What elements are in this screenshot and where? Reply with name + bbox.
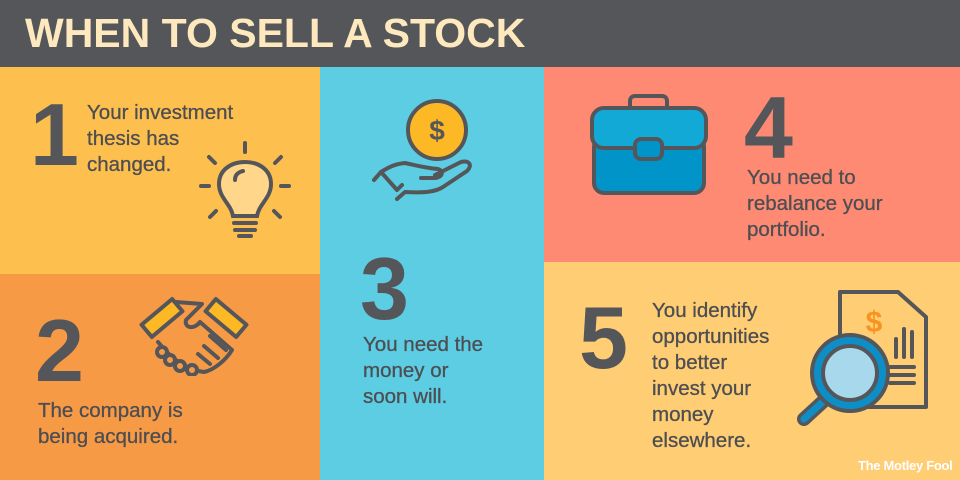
icon: hand with coin [372, 99, 472, 202]
number 1: 1 [30, 85, 79, 184]
panel 5 [544, 262, 960, 480]
number 5: 5 [579, 288, 628, 387]
text 2: The company is [38, 399, 183, 422]
title: WHEN TO SELL A STOCK [25, 10, 525, 56]
icon: document with magnifier [797, 290, 928, 426]
text 4: portfolio. [747, 218, 826, 241]
text 2 [38, 399, 183, 448]
text 1 [87, 101, 234, 176]
text 3: You need the [363, 333, 483, 356]
number 4: 4 [744, 78, 793, 177]
text 3 [363, 333, 483, 408]
text 5 [652, 299, 769, 452]
text 1: thesis has [87, 127, 179, 150]
icon: lightbulb [199, 141, 291, 238]
icon: briefcase [590, 94, 708, 195]
text 2: being acquired. [38, 425, 178, 448]
text 5: elsewhere. [652, 429, 751, 452]
text 3: money or [363, 359, 448, 382]
icon: document with magnifier: $ [866, 306, 883, 339]
icon: handshake [139, 296, 249, 376]
text 5: to better [652, 351, 727, 374]
text 5: You identify [652, 299, 757, 322]
panel 3 [320, 67, 544, 480]
panel 2 [0, 274, 320, 480]
text 5: money [652, 403, 714, 426]
text 4 [747, 166, 883, 241]
icon: hand with coin: $ [429, 115, 445, 146]
text 4: rebalance your [747, 192, 883, 215]
panel 1 [0, 67, 320, 274]
text 5: opportunities [652, 325, 769, 348]
text 4: You need to [747, 166, 856, 189]
text 5: invest your [652, 377, 751, 400]
header [0, 0, 960, 67]
text 1: changed. [87, 153, 171, 176]
number 2: 2 [35, 301, 84, 400]
logo: The Motley Fool [858, 458, 952, 473]
number 3: 3 [360, 239, 409, 338]
panel 4 [544, 67, 960, 262]
text 3: soon will. [363, 385, 447, 408]
text 1: Your investment [87, 101, 233, 124]
